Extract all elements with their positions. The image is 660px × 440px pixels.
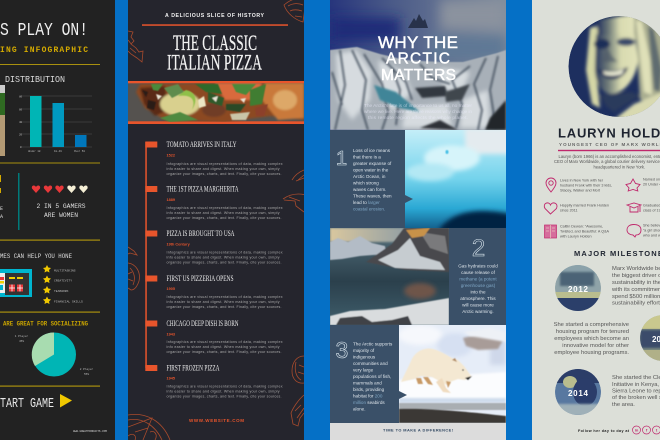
timeline item 4: 1905 <box>166 287 175 291</box>
stat text <box>36 203 86 219</box>
fact: graduated <box>643 204 660 212</box>
start game: TART GAME <box>0 397 54 412</box>
pie chart: 45% <box>19 340 24 343</box>
icon: graduation cap <box>627 203 641 212</box>
icon: star <box>626 179 640 191</box>
timeline item 2: 1889 <box>166 198 175 202</box>
panel: gaming infographic <box>0 0 115 440</box>
timeline item 5: organize your images, charts, and text. Finally, cite your sources. <box>166 350 282 354</box>
bar chart: age distribution: 20 <box>19 134 23 136</box>
timeline item 6: organize your images, charts, and text. Finally, cite your sources. <box>166 394 282 398</box>
block 1: 1 <box>336 148 347 170</box>
milestone 2012: 2012 <box>568 285 589 294</box>
bar chart: age distribution: 0 <box>20 146 22 149</box>
fact: named one of <box>643 178 660 186</box>
timeline item 3: organize your images, charts, and text. Finally, cite your sources. <box>166 260 282 264</box>
pie chart: 2 Player <box>80 367 94 371</box>
block 3: The Arctic supports <box>353 342 393 346</box>
timeline item 3: Infographics are visual representations of data, making complex <box>166 250 283 254</box>
heading: age distribution: DISTRIBUTION <box>5 75 65 85</box>
portrait <box>568 14 660 122</box>
block 2: Gas hydrates could <box>458 264 498 268</box>
follow footer: Follow her day to day at <box>578 429 630 433</box>
block 2: will cause more <box>462 302 494 308</box>
timeline item 1: 1522 <box>166 154 175 158</box>
follow footer <box>578 426 660 434</box>
skills list: MULTITASKING <box>54 270 76 272</box>
block 2: into the <box>470 290 486 294</box>
title: let's play on: S PLAY ON! <box>0 21 88 41</box>
fact: happily married: Happily married Frank Holden <box>560 204 609 208</box>
pie chart: 1 Player <box>15 334 29 338</box>
left stat fragment <box>0 175 3 220</box>
block 1: coastal erosion. <box>353 206 385 212</box>
timeline item 3: info easier to share and digest. When making your own, simply <box>166 256 280 260</box>
block 2: atmosphere. This <box>460 296 496 301</box>
intro text <box>364 103 472 121</box>
fact: book <box>560 224 610 238</box>
block 3: mammals and <box>353 380 382 386</box>
skills list: TEAMWORK <box>54 290 69 293</box>
arrow: block 3 pointer <box>399 391 407 399</box>
biography <box>554 154 660 170</box>
timeline item 6 <box>145 364 283 398</box>
block 1: open water in the <box>353 168 389 172</box>
stat text: ARE WOMEN <box>44 212 78 219</box>
icon: mountains <box>408 14 428 28</box>
block 1: greater expanse of <box>353 161 392 166</box>
block 1: that there is a <box>353 154 381 160</box>
block 2: Arctic warming. <box>462 309 494 314</box>
block 2: cause release of <box>461 270 496 275</box>
block 2: 2 <box>472 235 485 262</box>
icon: game console <box>0 269 32 297</box>
milestone 2013: innovative model for other <box>562 343 629 349</box>
skills list <box>43 265 83 304</box>
left stat fragment: A <box>0 214 3 220</box>
milestone 2013: She started a comprehensive <box>554 322 629 328</box>
biography: CEO of Marx Worldwide, a global courier delivery service <box>554 159 660 164</box>
fact: quote <box>643 224 660 238</box>
bar chart: age distribution: Under 18 <box>28 149 41 153</box>
bar chart: age distribution: 40 <box>19 121 23 124</box>
timeline item 4 <box>145 274 283 309</box>
intro text: The Arctic's fate is of importance to us all, no matter <box>364 103 472 109</box>
timeline item 5: Infographics are visual representations of data, making complex <box>166 340 283 344</box>
block 1: waves can form. <box>353 187 386 192</box>
icon: heart <box>544 203 557 214</box>
arrow: block 1 pointer <box>405 195 413 203</box>
icon: pin <box>546 178 556 192</box>
timeline item 2: Infographics are visual representations of data, making complex <box>166 206 283 210</box>
fact: book: Twisted, and Beautiful: A Q&A <box>560 230 610 234</box>
timeline item 4: organize your images, charts, and text. Finally, cite your sources. <box>166 305 282 309</box>
block 1 <box>330 130 405 228</box>
kicker: A DELICIOUS SLICE OF HISTORY <box>165 13 265 19</box>
photo: fjord <box>330 228 449 325</box>
biography: headquartered in New York. <box>594 164 645 170</box>
block 2: greenhouse gas) <box>461 283 496 288</box>
fact: lives in new york: Lives in New York with her <box>560 178 604 182</box>
block 1: Loss of ice means <box>353 148 391 153</box>
title: MATTERS <box>381 67 456 84</box>
bar chart: age distribution: Over 50 <box>74 150 85 153</box>
pizza photo band <box>128 81 304 124</box>
timeline line <box>145 142 147 368</box>
block 3: birds, providing <box>353 387 385 392</box>
bar chart: age distribution: 60 <box>19 108 23 112</box>
fact: happily married <box>560 204 609 212</box>
timeline item 3: 19th Century <box>166 242 191 246</box>
heading: games are great for socializing: ARE GREAT FOR SOCIALIZING <box>3 320 88 328</box>
timeline item 2: THE 1ST PIZZA MARGHERITA <box>166 184 239 194</box>
skills list: FINANCIAL SKILLS <box>54 300 83 304</box>
timeline item 5: CHICAGO DEEP DISH IS BORN <box>166 319 239 328</box>
skills list: CREATIVITY <box>54 280 72 282</box>
timeline item 1: info easier to share and digest. When making your own, simply <box>166 167 280 171</box>
bar chart: age distribution: 18-49 <box>54 150 62 153</box>
timeline item 6: Infographics are visual representations of data, making complex <box>166 384 283 388</box>
follow footer: in <box>635 428 639 432</box>
title: WHY THE <box>378 33 458 52</box>
timeline item 3: PIZZA IS BROUGHT TO USA <box>166 229 235 238</box>
timeline item 6: FIRST FROZEN PIZZA <box>166 364 220 372</box>
block 3: million seabirds <box>353 400 385 405</box>
fact: lives in new york: Stacey, Walker and Mort <box>560 188 600 192</box>
title <box>378 33 458 84</box>
icon: book <box>544 225 556 238</box>
timeline item 1: Infographics are visual representations of data, making complex <box>166 162 283 166</box>
block 3: indigenous <box>353 354 376 360</box>
icon: speech bubble <box>627 224 641 237</box>
intro text: where we live. Here are three reasons why change in <box>364 109 472 115</box>
hearts: 2 in 5 gamers are women <box>32 185 88 193</box>
milestone 2013: employee housing programs. <box>554 350 629 356</box>
subtitle: gaming infographic: ING INFOGRAPHIC <box>0 46 88 55</box>
timeline item 5: info easier to share and digest. When making your own, simply <box>166 345 280 349</box>
milestone 2014: the area. <box>612 402 635 408</box>
title: ITALIAN PIZZA <box>167 50 262 74</box>
website footer: WWW.GREATPRODUCTS.COM <box>73 430 107 433</box>
timeline item 4: FIRST US PIZZERIA OPENS <box>166 274 234 283</box>
timeline item 2 <box>145 184 283 220</box>
fact: book: with Lauryn Holden <box>560 234 592 238</box>
block 2: methane (a potent <box>459 276 497 282</box>
pie chart: 55% <box>84 373 89 376</box>
milestone 2014: 2014 <box>568 389 589 398</box>
photo fragment <box>0 85 5 156</box>
title <box>167 30 262 74</box>
block 3: majority of <box>353 348 375 353</box>
block 1: Arctic Ocean, in <box>353 174 386 179</box>
timeline item 4: Infographics are visual representations of data, making complex <box>166 295 283 299</box>
milestone 2012 <box>555 265 660 311</box>
photo: iceberg <box>405 128 510 232</box>
fact: happily married: since 2011 <box>560 208 578 212</box>
photo: arctic fox <box>398 325 506 423</box>
fact: lives in new york <box>560 178 612 192</box>
website: WWW.WEBSITE.COM <box>189 418 244 423</box>
timeline item 1: TOMATO ARRIVES IN ITALY <box>166 140 237 149</box>
stat text: 2 IN 5 GAMERS <box>36 203 86 210</box>
bar chart: age distribution <box>19 96 92 153</box>
panel: lauryn holden resume <box>532 0 660 440</box>
block 3: very large <box>353 368 374 372</box>
timeline item 2: info easier to share and digest. When making your own, simply <box>166 211 280 215</box>
block 3: communities and <box>353 361 388 366</box>
block 3: habitat for 200 <box>353 394 383 398</box>
header photo: glacier <box>330 0 506 130</box>
title: ARCTIC <box>386 50 450 68</box>
timeline item 6: info easier to share and digest. When making your own, simply <box>166 390 280 394</box>
timeline item 4: info easier to share and digest. When making your own, simply <box>166 300 280 304</box>
block 3 <box>330 325 399 423</box>
block 2 <box>449 228 506 325</box>
timeline item 1: organize your images, charts, and text. Finally, cite your sources. <box>166 172 282 176</box>
follow footer: t <box>656 428 658 432</box>
left stat fragment: E <box>0 206 3 212</box>
timeline item 3 <box>145 229 283 264</box>
fact: lives in new york: husband Frank with their 3 kids, <box>560 184 612 188</box>
heading: games can help you hone: MES CAN HELP YOU HONE <box>0 253 72 260</box>
milestone 2014 <box>555 369 660 416</box>
timeline item 5 <box>145 319 283 354</box>
block 3: 3 <box>336 337 348 363</box>
footer: time to make a difference: TIME TO MAKE A DIFFERENCE! <box>383 428 453 432</box>
milestone 2013 <box>554 315 660 362</box>
panel: classic italian pizza <box>128 0 306 440</box>
bar chart: age distribution: 80 <box>19 96 23 98</box>
panel: why the arctic matters <box>330 0 510 440</box>
fact: book: Caitlin Dewan: "Awesome, <box>560 224 603 228</box>
timeline item 2: organize your images, charts, and text. Finally, cite your sources. <box>166 216 282 220</box>
block 1: These waves, then <box>353 194 392 198</box>
block 1: which strong <box>353 180 379 186</box>
doodles: pizza sketches <box>128 0 306 440</box>
footer: time to make a difference <box>330 423 506 440</box>
pie chart <box>15 332 94 376</box>
block 3: alone. <box>353 406 366 412</box>
title: THE CLASSIC <box>173 30 257 55</box>
timeline item 6: 1945 <box>166 376 175 380</box>
follow footer: f <box>646 428 648 432</box>
timeline item 5: 1943 <box>166 332 175 336</box>
block 1: lead to larger <box>353 200 380 205</box>
milestone 2012: sustainability in the <box>612 280 660 286</box>
milestone 2013: employees which become an <box>554 336 629 342</box>
timeline item 1 <box>145 140 283 176</box>
milestone 2013: housing program for tenured <box>556 329 629 335</box>
block 3: populations of fish, <box>353 374 391 379</box>
intro text: this remote region affects the whole planet. <box>368 115 468 121</box>
